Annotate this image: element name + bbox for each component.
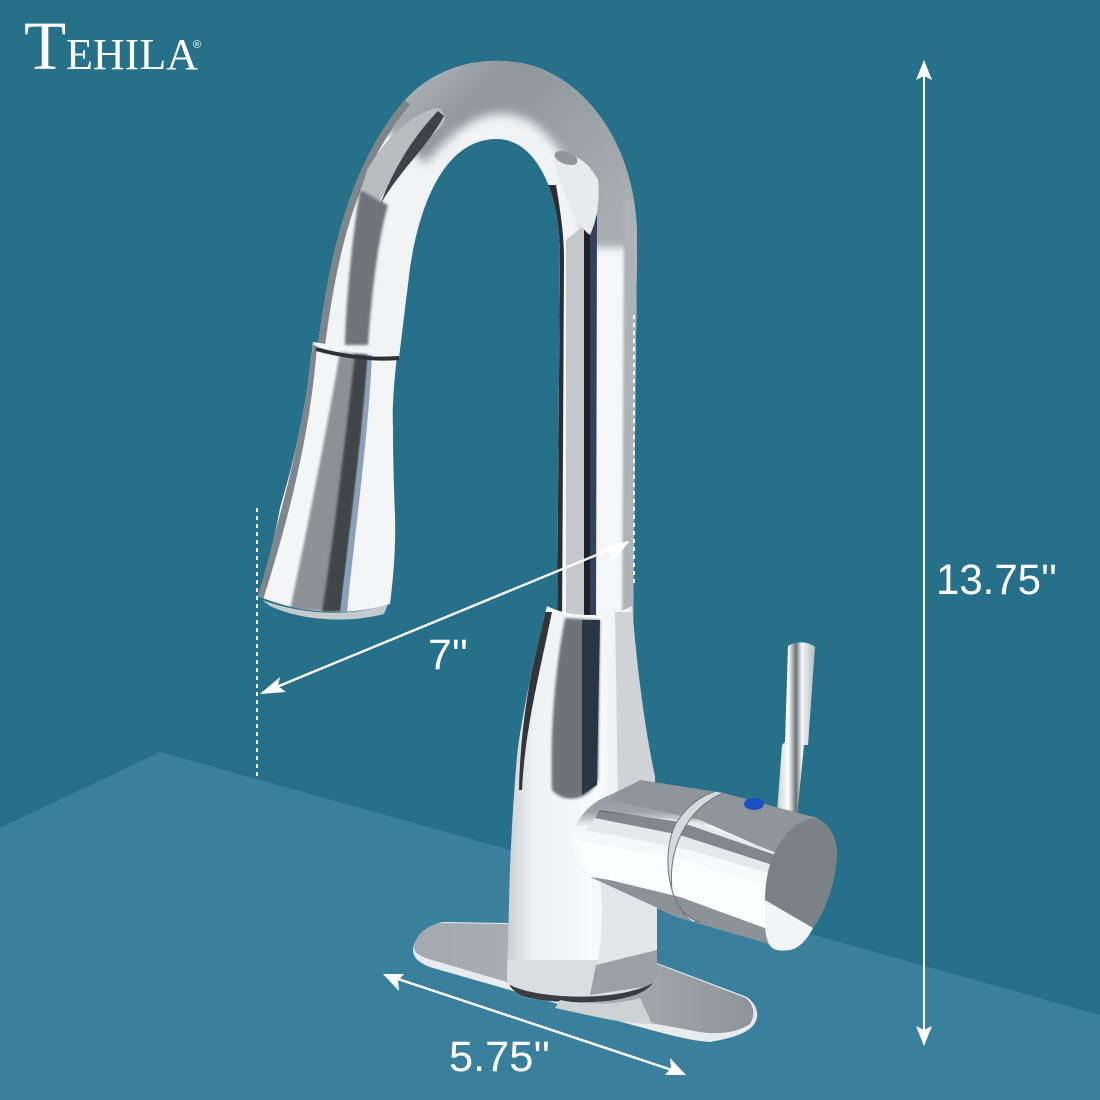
- riser bright base: [557, 244, 637, 620]
- spray nozzle: [262, 600, 388, 620]
- body left edge stripe: [519, 612, 552, 790]
- dimension: reach: [257, 315, 634, 776]
- dimension: height: 13.75'': [936, 556, 1057, 604]
- handle cylinder: [576, 780, 837, 944]
- dimension: deck plate width: [383, 974, 686, 1081]
- riser blue stripe: [590, 215, 597, 630]
- riser mid reflection: [566, 225, 585, 630]
- countertop: [0, 752, 1100, 1100]
- riser black stripe: [584, 215, 590, 630]
- plate lower highlight: [555, 998, 652, 1024]
- top reflection patch: [360, 108, 445, 200]
- body lower gray: [507, 960, 650, 1001]
- dimension: height: [916, 60, 1057, 1046]
- spray head: [258, 342, 396, 612]
- faucet body: [507, 606, 657, 1002]
- body right sheen: [615, 612, 656, 791]
- gooseneck spout: [318, 60, 637, 622]
- dimension: deck plate width: 5.75'': [449, 1033, 550, 1081]
- faucet: [250, 50, 850, 1042]
- handle lower shadow: [590, 877, 768, 944]
- riser right gray edge: [620, 202, 637, 620]
- spout dull top: [385, 61, 637, 250]
- outer dark edge: [318, 100, 405, 345]
- body dark reflection: [552, 618, 600, 799]
- logo: Tehila: ®: [193, 39, 201, 51]
- logo: Tehila: [24, 8, 201, 84]
- spout dark reflection: [345, 190, 388, 345]
- riser head reflection: [553, 155, 599, 235]
- temperature indicator: [744, 798, 764, 810]
- handle upper bands: [612, 780, 817, 852]
- lever: [777, 642, 815, 817]
- spray seam: [316, 349, 399, 359]
- logo: Tehila: EHILA: [66, 30, 198, 79]
- logo: Tehila: T: [24, 8, 66, 84]
- dimension: reach: 7'': [428, 631, 468, 679]
- handle end cap: [765, 818, 837, 950]
- riser left dark edge: [548, 185, 564, 630]
- deck plate: [413, 922, 757, 1042]
- collar ring: [668, 790, 723, 922]
